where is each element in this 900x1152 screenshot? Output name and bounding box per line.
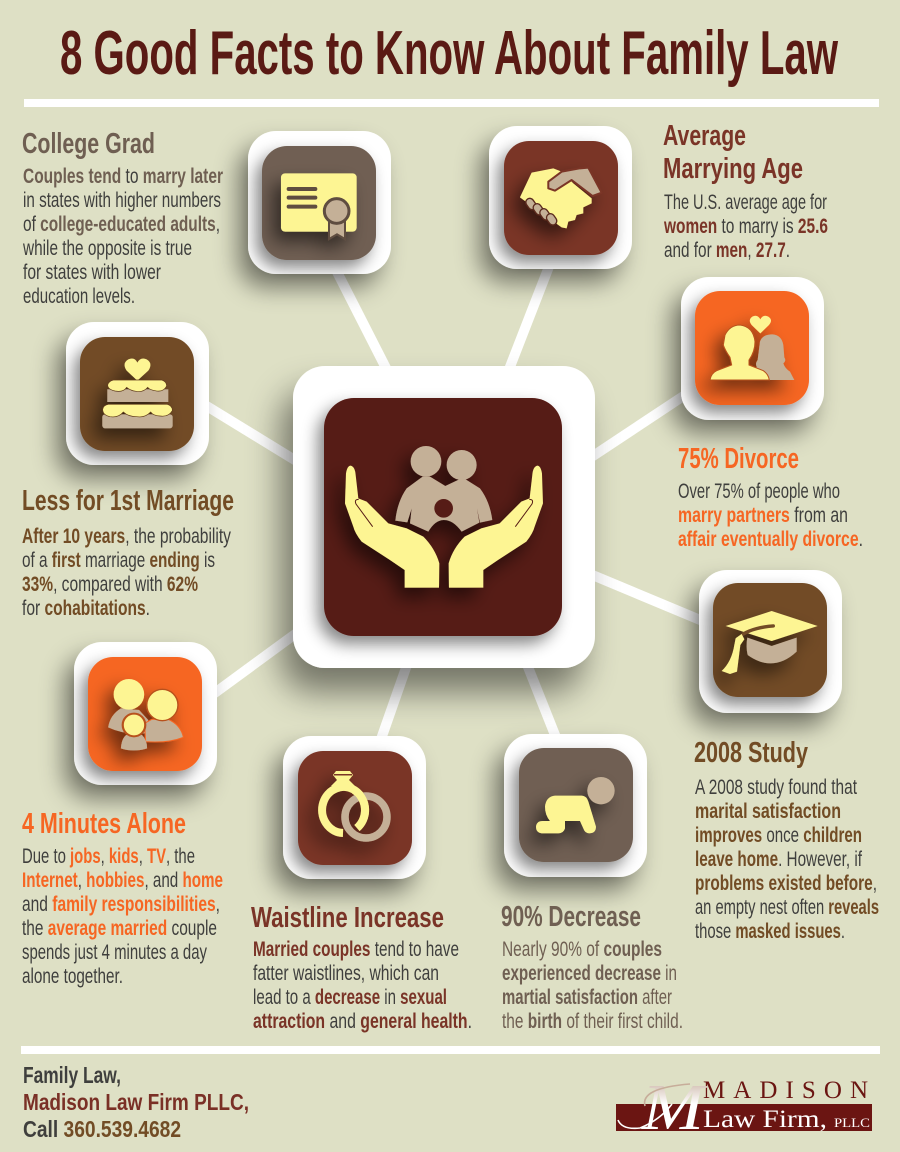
text block: college grad [22, 128, 223, 308]
text block: 4 minutes alone: 4 Minutes Alone [22, 808, 186, 840]
text block: 4 minutes alone: and family responsibilities, [22, 893, 220, 916]
text block: average marrying age: Marrying Age [663, 153, 803, 185]
text block: 4 minutes alone: Due to jobs, kids, TV, the [22, 845, 195, 868]
text block: college grad: education levels. [23, 285, 135, 308]
panel: crawling baby icon [504, 734, 647, 877]
panel: graduation cap icon [699, 570, 842, 713]
text block: 75% divorce [678, 443, 863, 551]
text block: 4 minutes alone: Internet, hobbies, and home [22, 869, 223, 892]
text block: college grad: of college-educated adults, [23, 213, 220, 236]
text block: average marrying age [663, 120, 828, 262]
text block: waistline increase [251, 902, 472, 1033]
text block: average marrying age: and for men, 27.7. [664, 239, 790, 262]
text block: less for 1st marriage: 33%, compared with 62% [22, 573, 198, 596]
connector lines [205, 264, 705, 742]
icon: hands holding family [345, 446, 543, 588]
text block: footer contact: Call 360.539.4682 [23, 1116, 181, 1142]
text block: waistline increase: fatter waistlines, which can [253, 962, 439, 985]
text block: 75% divorce: 75% Divorce [678, 443, 799, 475]
panel: family icon [74, 642, 217, 785]
text block: footer contact: Family Law, [23, 1062, 121, 1088]
text block: 90% decrease [501, 901, 683, 1033]
logo: Madison Law Firm: M [641, 1071, 709, 1144]
text block: average marrying age: women to marry is 25.6 [663, 215, 828, 238]
text block: average marrying age: The U.S. average age for [664, 191, 827, 214]
text block: college grad: in states with higher numbers [23, 189, 221, 212]
text block: 4 minutes alone [22, 808, 223, 988]
text block: college grad: Couples tend to marry later [23, 165, 223, 188]
panel: college grad icon [248, 131, 391, 274]
text block: 2008 study: leave home. However, if [695, 848, 862, 871]
panel: wedding cake icon [66, 322, 209, 465]
panel: handshake icon [489, 126, 632, 269]
logo: Madison Law Firm: Law Firm, [703, 1106, 827, 1133]
logo: Madison Law Firm: MADISON [703, 1077, 868, 1104]
text block: 90% decrease: experienced decrease in [502, 962, 677, 985]
text block: average marrying age: Average [663, 120, 746, 152]
text block: waistline increase: attraction and general health. [253, 1010, 472, 1033]
icon: wedding cake [102, 359, 173, 428]
text block: 90% decrease: the birth of their first child. [502, 1010, 683, 1033]
text block: 90% decrease: Nearly 90% of couples [502, 938, 662, 961]
panel: wedding rings icon [283, 736, 426, 879]
text block: less for 1st marriage: for cohabitations. [22, 597, 150, 620]
text block: less for 1st marriage: After 10 years, the probability [22, 525, 231, 548]
panel: couple icon [681, 277, 824, 420]
text block: college grad: for states with lower [23, 261, 161, 284]
text block: 75% divorce: marry partners from an [678, 504, 848, 527]
text block: 2008 study: those masked issues. [695, 920, 845, 943]
text block: waistline increase: Waistline Increase [251, 902, 444, 934]
panel: center family card [293, 366, 595, 668]
text block: 2008 study: marital satisfaction [695, 800, 841, 823]
text block: 2008 study [694, 737, 879, 943]
text block: college grad: while the opposite is true [22, 237, 192, 260]
icon: diploma [281, 173, 357, 239]
text block: waistline increase: Married couples tend to have [253, 938, 459, 961]
text block: footer contact [23, 1062, 249, 1142]
text block: less for 1st marriage: of a first marriage ending is [22, 549, 215, 572]
logo: Madison Law Firm [616, 1071, 872, 1144]
text block: less for 1st marriage [22, 485, 234, 620]
text block: 2008 study: improves once children [695, 824, 862, 847]
icon: crawling baby [536, 777, 615, 833]
text block: 2008 study: an empty nest often reveals [695, 896, 879, 919]
text block: 4 minutes alone: alone together. [22, 965, 123, 988]
text block: 4 minutes alone: spends just 4 minutes a day [22, 941, 207, 964]
icon: couple with heart [710, 316, 794, 380]
text block: 4 minutes alone: the average married couple [22, 917, 217, 940]
text block: 90% decrease: 90% Decrease [501, 901, 641, 933]
icon: family [108, 679, 183, 750]
icon: wedding rings [322, 771, 387, 838]
logo: Madison Law Firm: PLLC [834, 1115, 870, 1130]
text block: waistline increase: lead to a decrease in sexual [253, 986, 447, 1009]
icon: graduation cap [722, 611, 818, 674]
text block: footer contact: Madison Law Firm PLLC, [23, 1089, 249, 1115]
text block: 90% decrease: martial satisfaction after [502, 986, 672, 1009]
text block: college grad: College Grad [22, 128, 155, 160]
icon: handshake [520, 168, 602, 228]
text block: less for 1st marriage: Less for 1st Marriage [22, 485, 234, 517]
text block: 2008 study: 2008 Study [694, 737, 808, 769]
